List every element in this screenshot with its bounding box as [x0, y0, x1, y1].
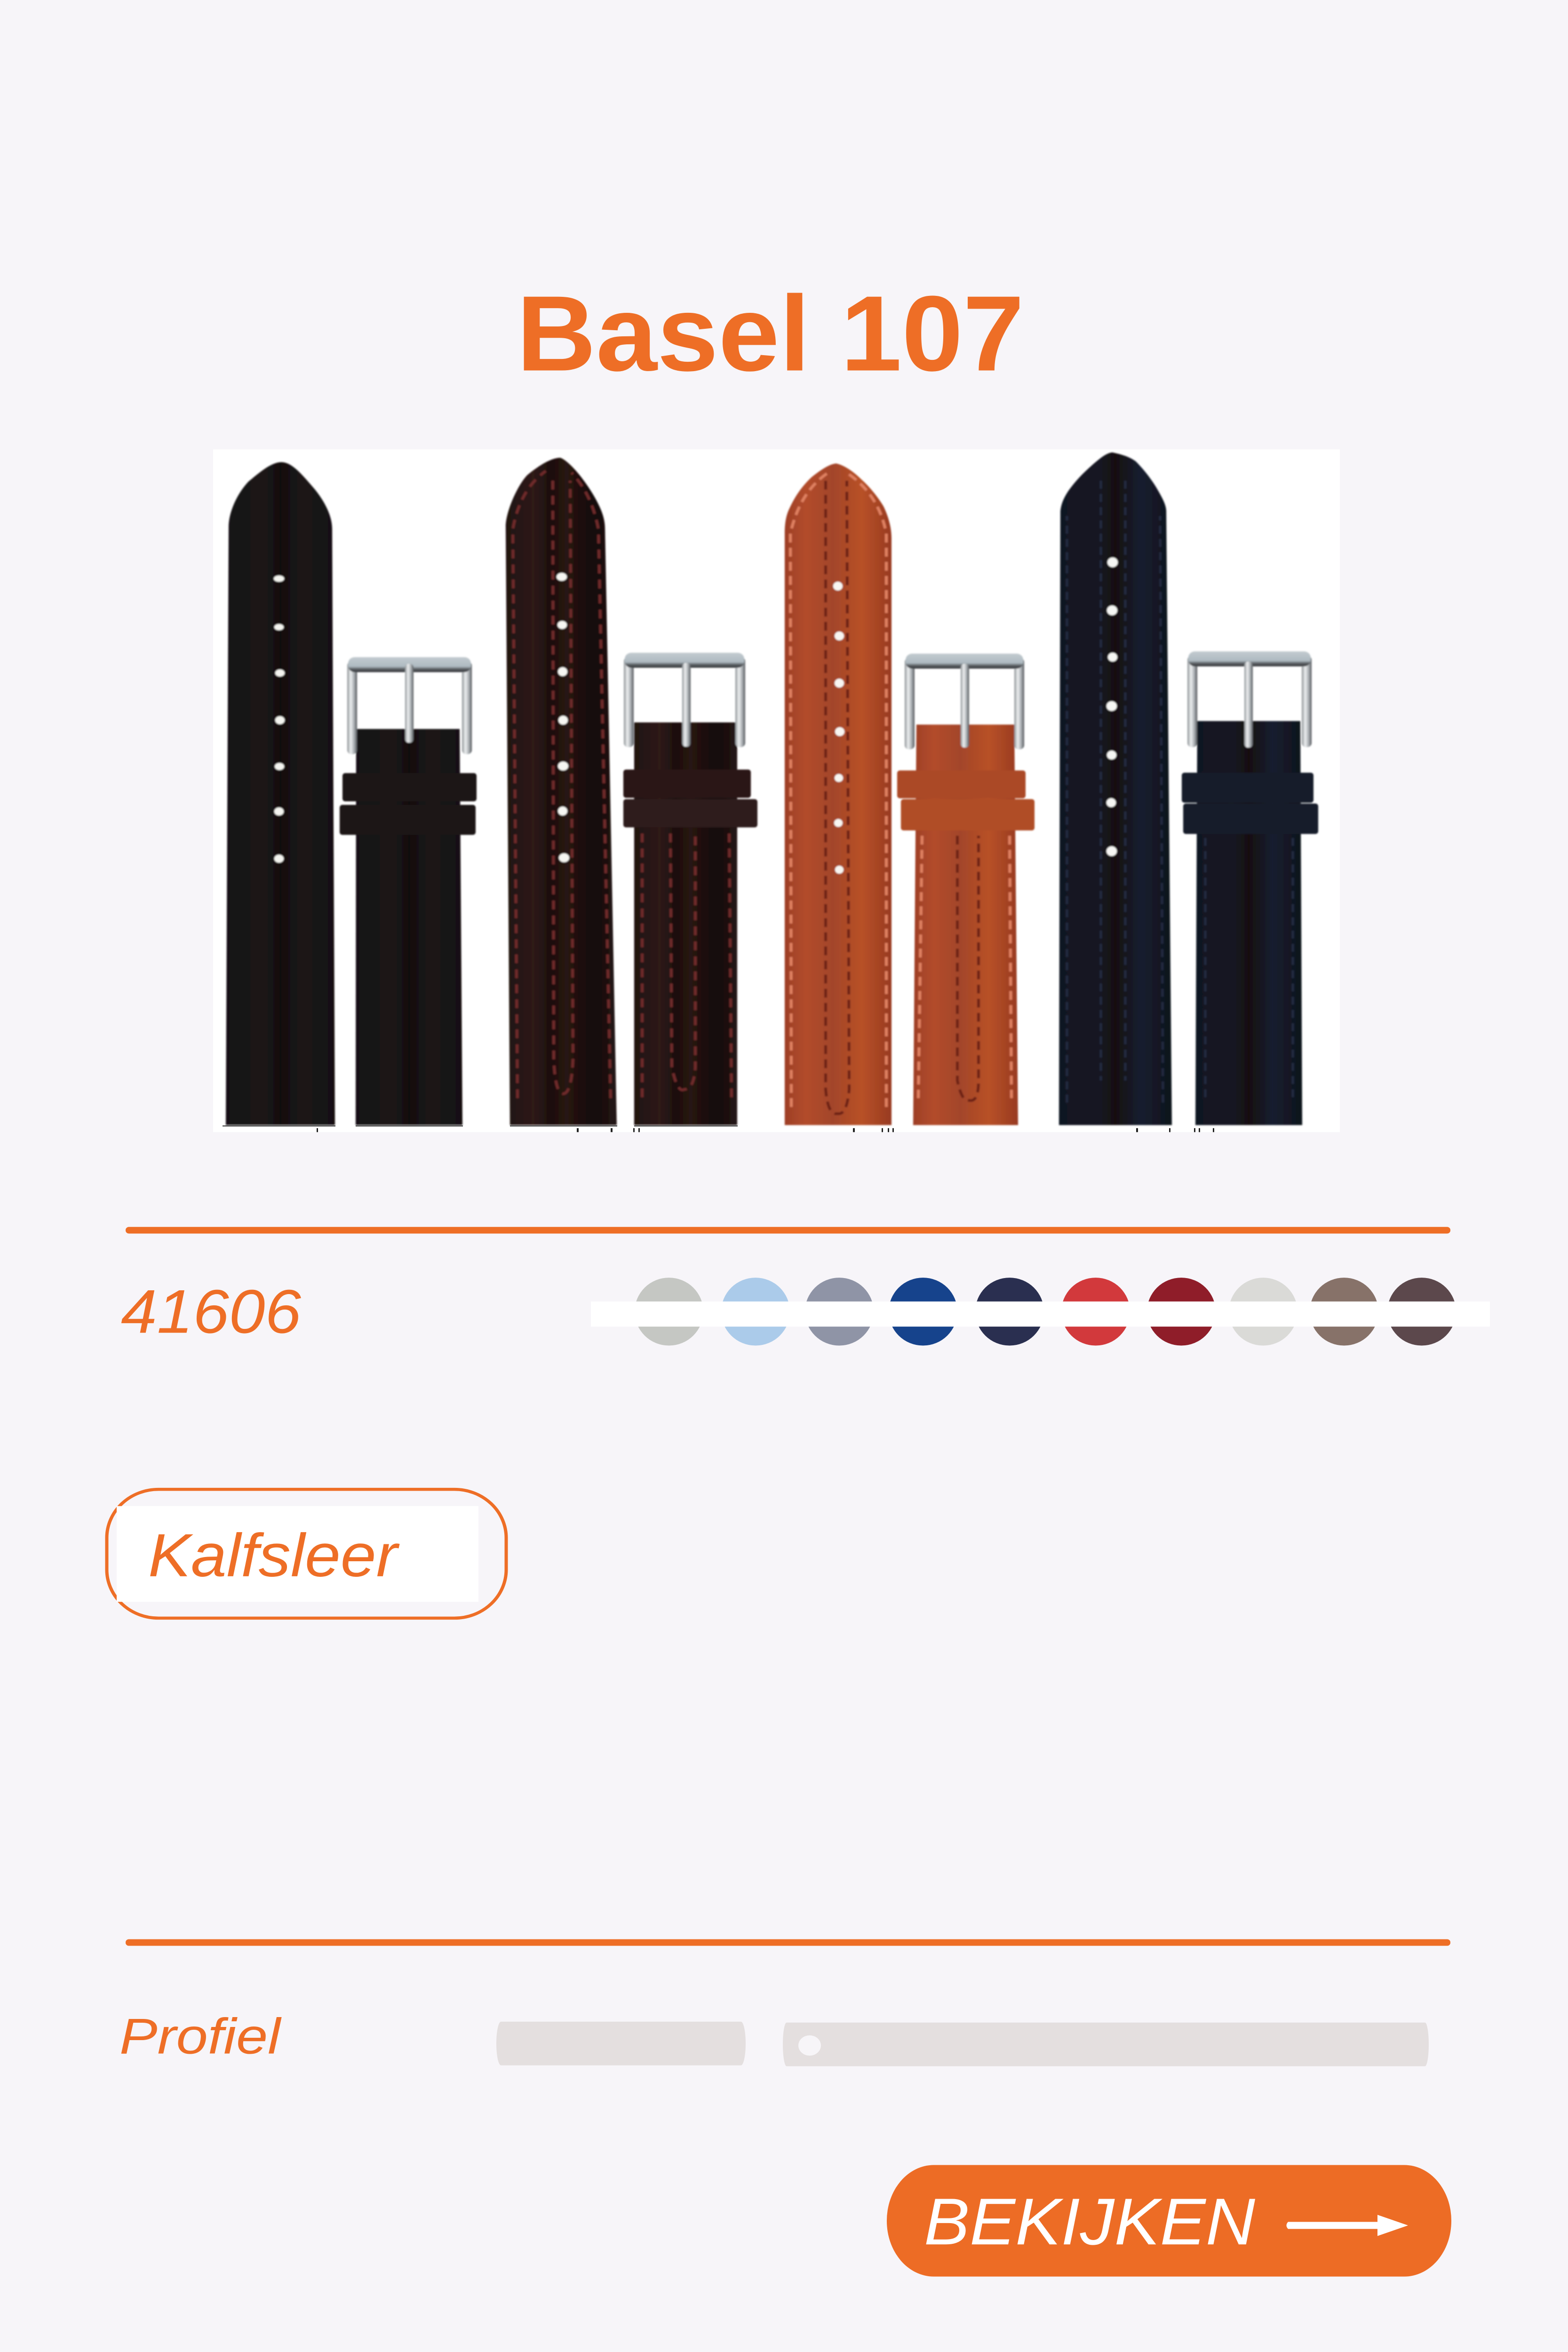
button: BEKIJKEN: [924, 2185, 1256, 2258]
scan tick marks: [223, 1126, 1214, 1132]
icon: arrow: [1286, 2215, 1408, 2236]
strap set: dark brown: [506, 458, 757, 1125]
article number: 41606: [121, 1277, 302, 1346]
button: [887, 2165, 1451, 2277]
product photo: four leather watch straps: [213, 449, 1340, 1132]
title: Basel 107: [517, 274, 1024, 393]
strap set: black: [226, 462, 477, 1125]
colour swatches: [591, 1278, 1490, 1345]
strap set: navy: [1059, 453, 1318, 1125]
strap set: cognac: [785, 463, 1035, 1125]
material tag: Kalfsleer: [148, 1522, 400, 1589]
profile label: Profiel: [119, 2009, 282, 2064]
material tag: [107, 1489, 506, 1618]
profile bar: long with marker: [783, 2023, 1429, 2066]
profile bar: short: [496, 2022, 746, 2066]
